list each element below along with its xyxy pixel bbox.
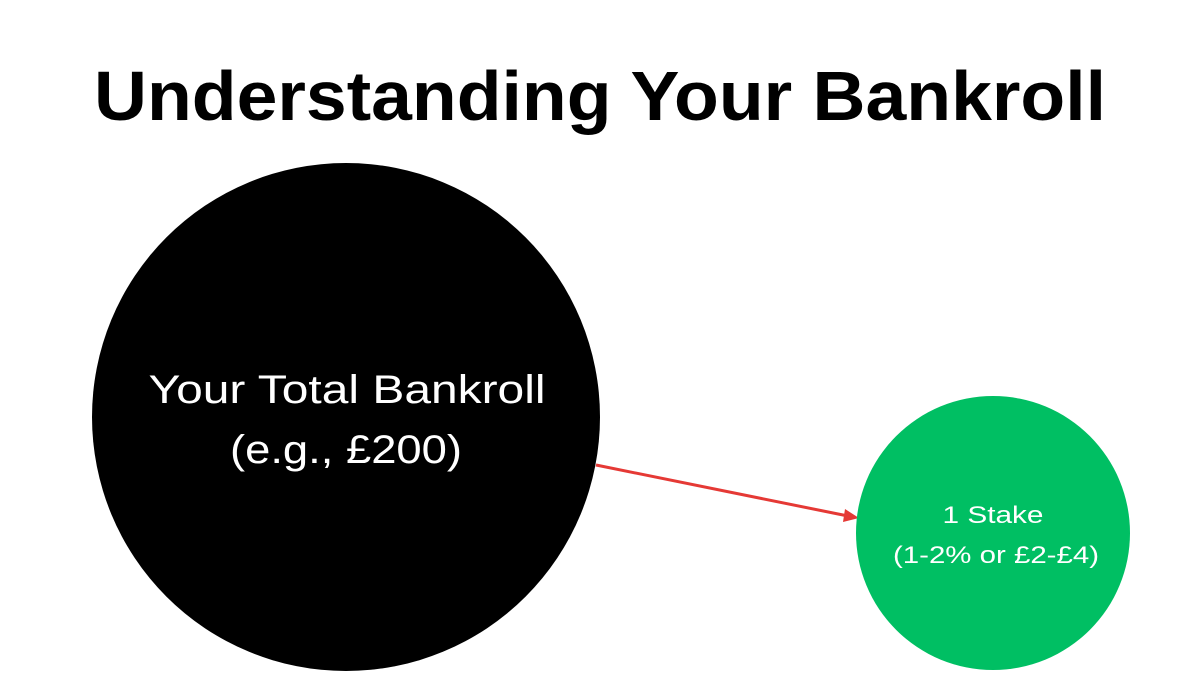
circle: total bankroll: (e.g., £200) [230, 428, 462, 472]
circle: one stake: (1-2% or £2-£4) [893, 542, 1099, 569]
circle: one stake [856, 396, 1130, 670]
circle: one stake: 1 Stake [942, 502, 1044, 529]
circle: total bankroll: Your Total Bankroll [148, 368, 546, 412]
circle: total bankroll [92, 163, 600, 671]
arrow [596, 465, 859, 522]
title: Understanding Your Bankroll [94, 57, 1106, 135]
